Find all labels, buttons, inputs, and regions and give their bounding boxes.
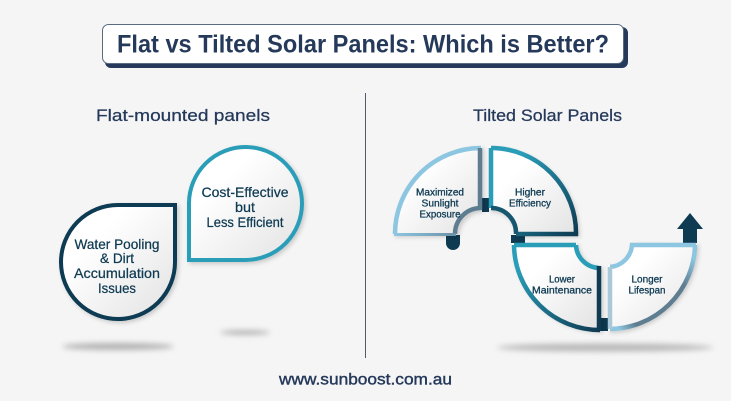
segment: maximized sunlight exposure [393,146,482,235]
callout: cost-effective [189,147,302,260]
segment: maximized sunlight exposure: Sunlight [422,198,459,210]
callout: water pooling: & Dirt [100,250,134,266]
callout: cost-effective: Cost-Effective [202,184,289,200]
segment: lower maintenance [512,243,601,331]
connector: tail [446,235,460,250]
callout: water pooling: Water Pooling [74,236,160,252]
segment: higher efficiency: Efficiency [509,198,551,210]
segment: longer lifespan: Lifespan [628,286,666,296]
callout: water pooling [61,205,175,319]
segment: longer lifespan: Longer [632,274,663,286]
segment: lower maintenance: Lower [549,274,576,286]
segment: higher efficiency: Higher [515,188,546,198]
heading: tilted solar panels: Tilted Solar Panels [473,106,622,125]
connector: block three [601,318,608,331]
segment: lower maintenance: Maintenance [532,286,592,296]
callout: cost-effective: but [235,199,255,215]
segment: maximized sunlight exposure: Exposure [420,210,461,220]
title [102,24,628,68]
segment: longer lifespan [608,243,697,331]
segment: maximized sunlight exposure: Maximized [416,188,464,198]
footer url: www.sunboost.com.au [278,372,452,388]
title: Flat vs Tilted Solar Panels: Which is Better? [117,30,609,58]
callout: water pooling: Issues [98,280,136,296]
ground shadows [62,330,713,352]
heading: flat-mounted panels: Flat-mounted panels [96,106,270,125]
connector: block one [482,198,489,212]
segment: higher efficiency [489,146,578,235]
callout: cost-effective: Less Efficient [206,214,284,230]
arrow [677,213,703,244]
connector: block two [511,235,525,243]
divider [364,93,366,358]
callout: water pooling: Accumulation [74,265,160,281]
